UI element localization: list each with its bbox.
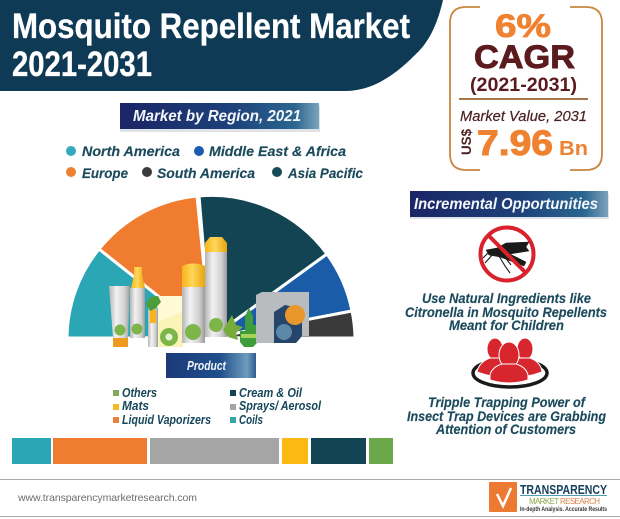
region legend xyxy=(66,143,363,181)
product legend: Others xyxy=(122,386,157,400)
product legend xyxy=(113,386,321,427)
product legend: Coils xyxy=(239,413,263,427)
heading: product xyxy=(166,353,256,378)
CAGR callout: US$ xyxy=(458,129,474,155)
region legend: Middle East & Africa xyxy=(209,143,346,159)
product legend: Sprays/ Aerosol xyxy=(239,399,321,413)
text: natural ingredients xyxy=(405,290,607,333)
logo: MARKET RESEARCH xyxy=(529,497,600,506)
region legend: Asia Pacific xyxy=(287,165,363,181)
text: natural ingredients: Meant for Children xyxy=(449,317,564,333)
vial xyxy=(146,296,161,347)
CAGR callout: CAGR xyxy=(474,39,575,75)
bottle xyxy=(130,267,145,338)
title xyxy=(12,7,410,84)
icon: no mosquito xyxy=(480,228,534,280)
heading: incremental opportunities: Incremental Opportunities xyxy=(414,196,598,213)
CAGR callout: (2021-2031) xyxy=(470,75,577,96)
text: insect trap devices: Tripple Trapping Power of xyxy=(428,394,586,410)
logo xyxy=(489,482,607,513)
product share bar xyxy=(12,438,393,464)
product legend: Mats xyxy=(122,399,149,413)
text: insect trap devices: Attention of Customers xyxy=(435,421,576,437)
title: 2021-2031 xyxy=(12,45,152,84)
product illustration xyxy=(75,237,325,347)
vaporizer xyxy=(240,308,258,347)
heading: incremental opportunities xyxy=(410,191,609,219)
region legend: Europe xyxy=(82,165,128,181)
tube xyxy=(109,286,130,347)
CAGR callout: 6% xyxy=(495,8,551,44)
heading: product: Product xyxy=(187,358,227,373)
carton xyxy=(157,296,183,347)
footer xyxy=(0,479,620,517)
tall spray can xyxy=(205,237,227,337)
CAGR callout xyxy=(450,7,602,170)
header banner xyxy=(0,0,443,91)
heading: market by region: Market by Region, 2021 xyxy=(133,108,301,125)
box xyxy=(256,292,309,343)
CAGR callout: Market Value, 2031 xyxy=(460,109,587,125)
text: insect trap devices xyxy=(407,394,606,437)
text: natural ingredients: Use Natural Ingredients like xyxy=(422,290,591,306)
website url: www.transparencymarketresearch.com xyxy=(17,492,197,504)
heading: market by region xyxy=(120,103,320,132)
product legend: Cream & Oil xyxy=(239,386,302,400)
product legend: Liquid Vaporizers xyxy=(122,413,211,427)
spray can xyxy=(182,264,205,343)
region legend: North America xyxy=(82,143,180,159)
CAGR callout: 7.96 xyxy=(477,124,553,163)
leaves xyxy=(223,315,243,340)
icon: people group xyxy=(473,338,547,387)
CAGR callout: Bn xyxy=(559,138,588,160)
region legend: South America xyxy=(157,165,255,181)
semicircle chart: market share by region xyxy=(67,195,355,338)
title: Mosquito Repellent Market xyxy=(12,7,410,46)
